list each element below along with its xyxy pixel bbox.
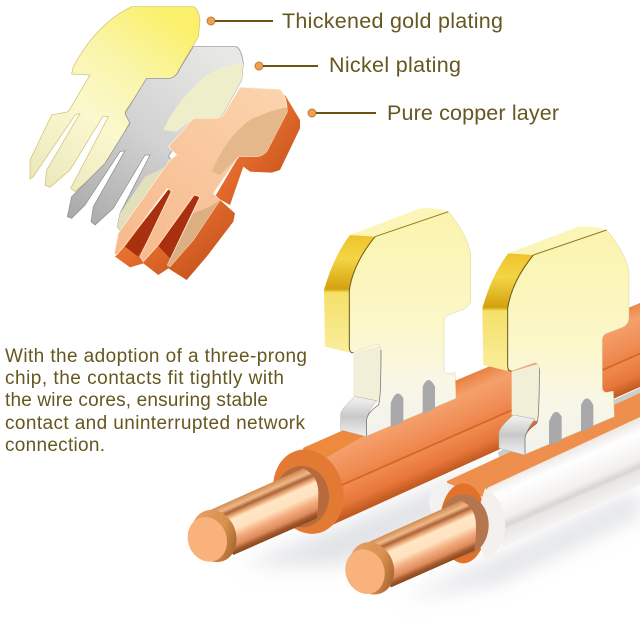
callout: copper layer (308, 101, 559, 125)
description text: contact and uninterrupted network (5, 413, 306, 434)
left contact chip (324, 208, 471, 437)
orange insulated wire (303, 303, 640, 526)
description text: the wire cores, ensuring stable (5, 390, 268, 411)
white insulated wire (445, 388, 640, 547)
wire shadows (240, 465, 640, 600)
nickel plating layer (67, 47, 243, 230)
pure copper layer (114, 87, 300, 280)
description text: chip, the contacts fit tightly with (5, 368, 284, 389)
bare copper core 2 (339, 501, 476, 601)
description text: connection. (5, 435, 105, 456)
collar of white wire (339, 480, 505, 601)
gold plating layer (30, 7, 200, 192)
callout: nickel plating: Nickel plating (329, 53, 461, 77)
callout: copper layer: Pure copper layer (387, 101, 559, 125)
description text: With the adoption of a three-prong (5, 346, 307, 367)
callout: gold plating: Thickened gold plating (282, 9, 503, 33)
collar of orange wire (181, 432, 365, 569)
right contact chip (482, 226, 629, 455)
description text (5, 346, 307, 456)
callout: nickel plating (255, 53, 461, 77)
plated chip layers diagram (30, 7, 300, 280)
bare copper core 1 (181, 468, 318, 569)
